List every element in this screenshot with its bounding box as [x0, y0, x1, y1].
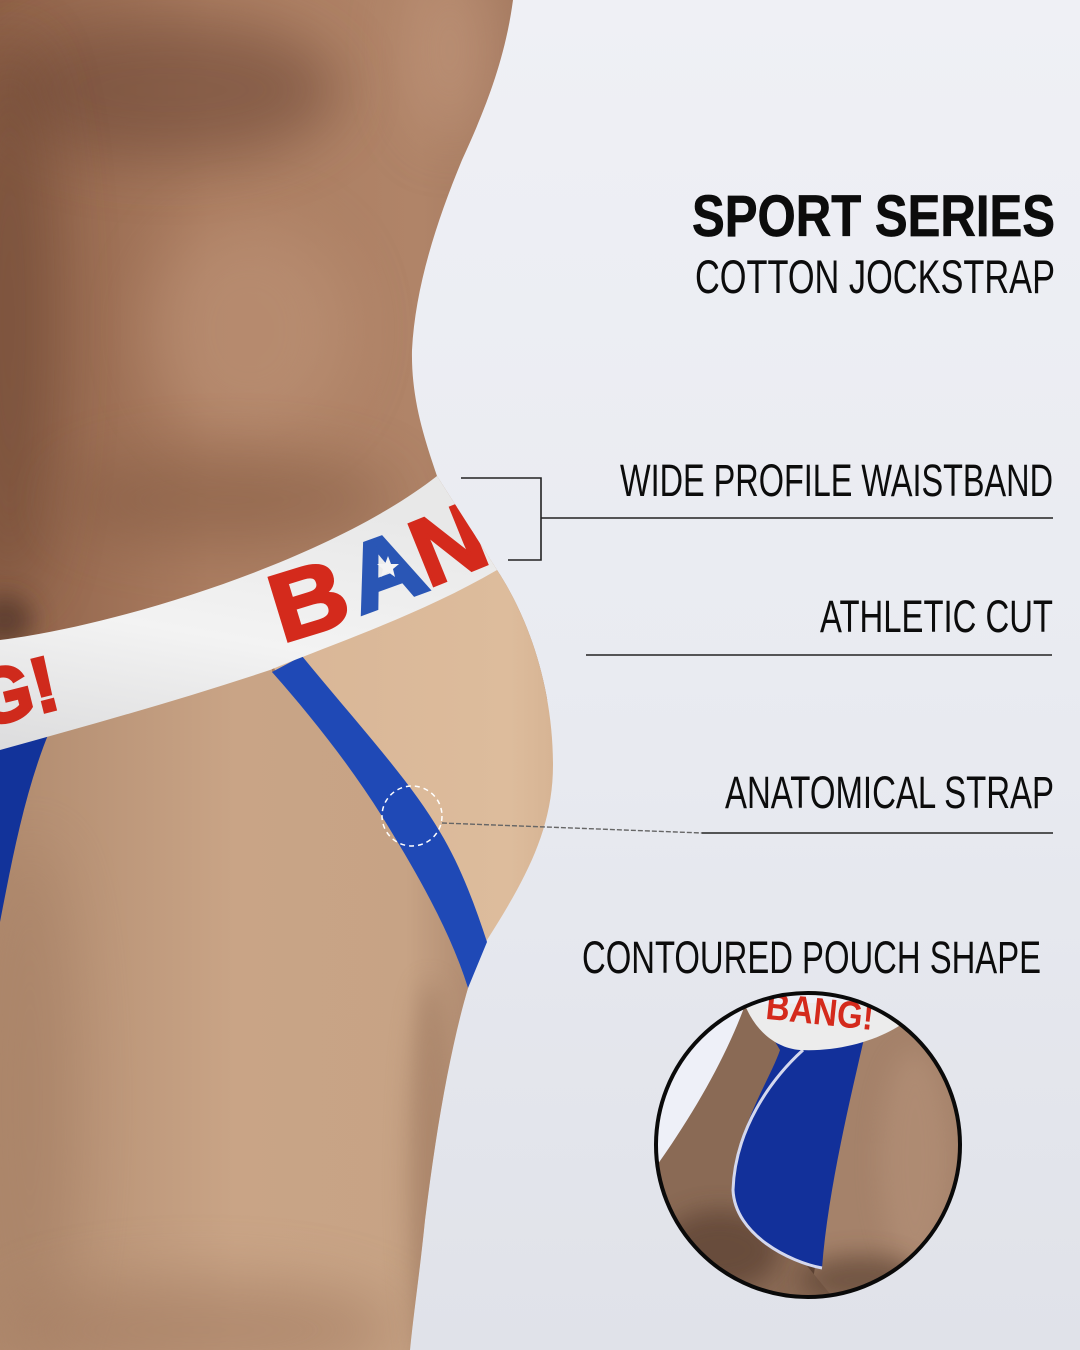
waistband logo: A	[331, 508, 439, 635]
figure: torso and leg wearing the garment	[0, 0, 600, 1350]
inset right leg	[814, 1026, 958, 1294]
title	[692, 184, 1055, 303]
inset logo: BANG!	[764, 986, 876, 1039]
anatomical strap	[272, 656, 487, 988]
upper leg	[0, 640, 480, 1350]
inset left leg	[659, 1008, 830, 1295]
waistband logo	[0, 482, 501, 744]
inset waistband	[745, 1000, 905, 1050]
waistband logo: B	[257, 539, 361, 663]
buttock and hip	[274, 546, 553, 1000]
pouch edge at far left	[0, 730, 50, 922]
inset shadow base	[806, 1266, 815, 1274]
waistband logo: N	[396, 482, 501, 607]
strap detail marker	[382, 786, 442, 846]
callout: anatomical strap	[442, 767, 1054, 833]
callout: waistband	[461, 455, 1053, 560]
wide profile waistband	[0, 476, 501, 750]
inset fabric panel	[733, 1030, 866, 1268]
inset detail circle	[650, 986, 970, 1310]
